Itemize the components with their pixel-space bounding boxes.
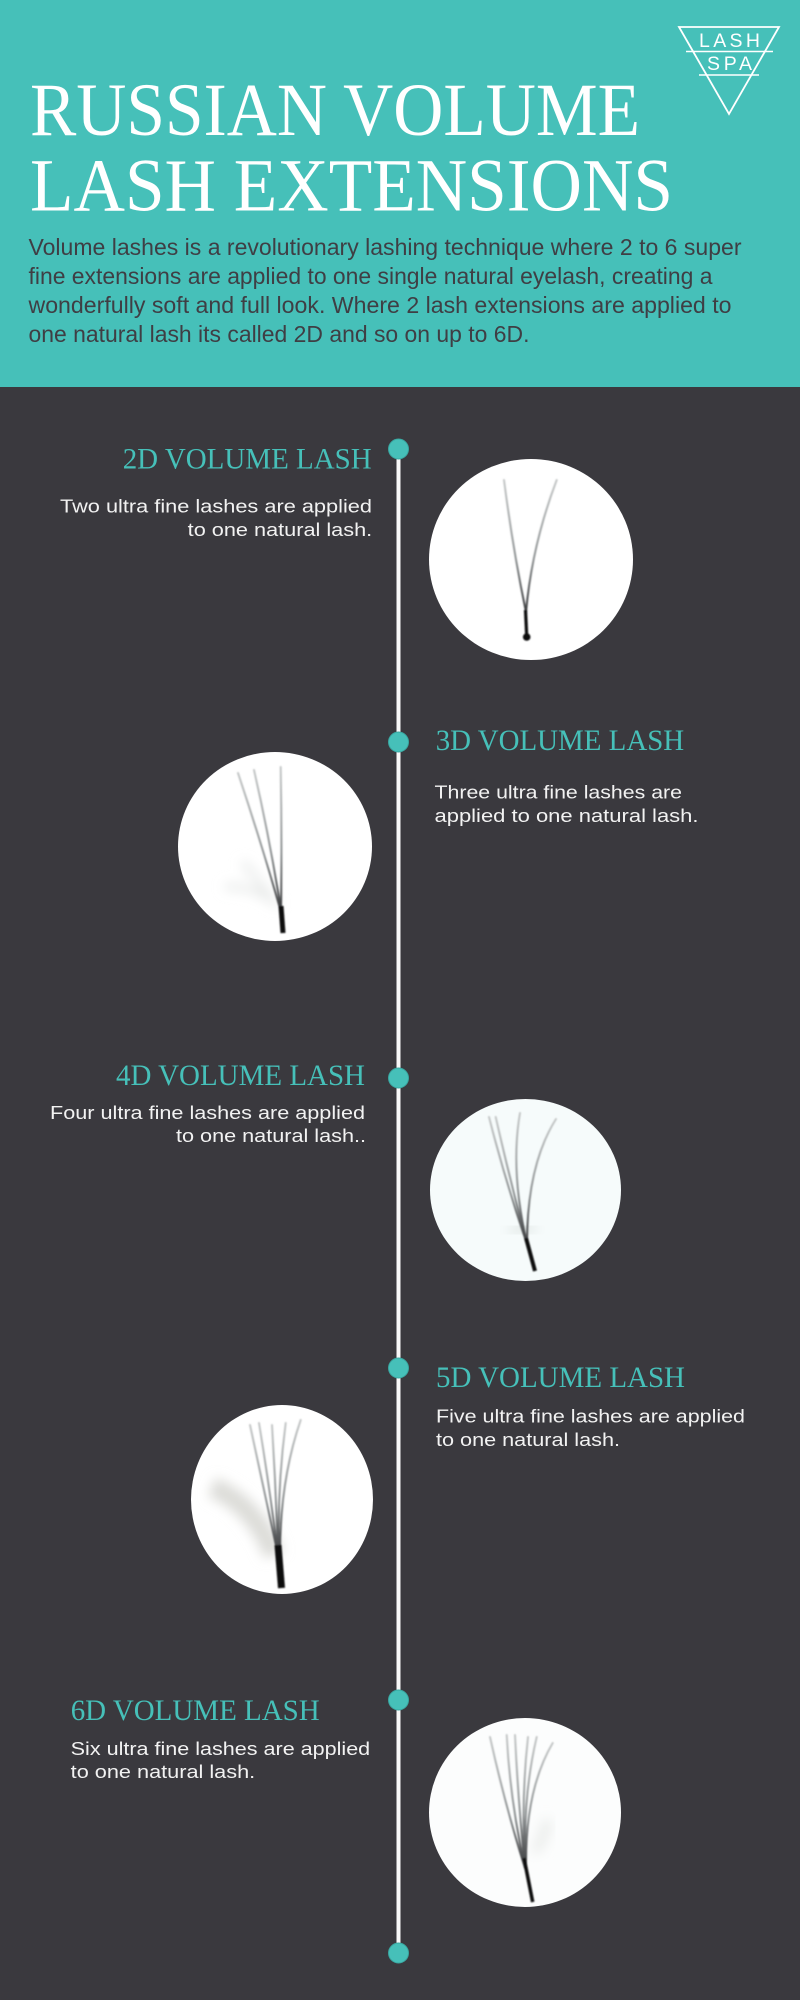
intro text block bbox=[27, 234, 742, 347]
description: 6D bbox=[71, 1738, 370, 1782]
heading: 3D: 3D VOLUME LASH bbox=[436, 724, 684, 757]
description: 3D: applied to one natural lash. bbox=[434, 805, 698, 826]
description: 4D bbox=[50, 1102, 366, 1146]
heading: 6D: 6D VOLUME LASH bbox=[71, 1694, 320, 1727]
intro text block: fine extensions are applied to one single natural eyelash, creating a bbox=[28, 263, 713, 289]
marker: 2D bbox=[388, 439, 408, 459]
marker: 4D bbox=[388, 1068, 408, 1088]
image: 2D lash bbox=[429, 459, 633, 660]
description: 6D: Six ultra fine lashes are applied bbox=[71, 1738, 370, 1759]
title: LASH EXTENSIONS bbox=[30, 144, 673, 228]
title: RUSSIAN VOLUME bbox=[30, 69, 640, 152]
logo: Lash Spa bbox=[679, 27, 779, 114]
intro text block: Volume lashes is a revolutionary lashing technique where 2 to 6 super bbox=[28, 234, 742, 260]
marker: 3D bbox=[388, 732, 408, 752]
panel: 3D text bbox=[434, 724, 698, 826]
heading: 2D: 2D VOLUME LASH bbox=[123, 442, 372, 475]
description: 2D: Two ultra fine lashes are applied bbox=[60, 496, 372, 517]
image: 6D lash bbox=[429, 1718, 621, 1907]
description: 2D: to one natural lash. bbox=[188, 519, 372, 540]
description: 2D bbox=[60, 496, 372, 540]
title bbox=[30, 69, 673, 228]
description: 4D: to one natural lash.. bbox=[176, 1125, 366, 1146]
image: 4D lash bbox=[430, 1099, 621, 1281]
intro text block: one natural lash its called 2D and so on up to 6D. bbox=[28, 321, 530, 347]
marker: end bbox=[388, 1943, 408, 1963]
logo: Lash Spa: LASH bbox=[699, 30, 760, 52]
description: 6D: to one natural lash. bbox=[71, 1761, 255, 1782]
marker: 5D bbox=[388, 1358, 408, 1378]
intro text block: wonderfully soft and full look. Where 2 lash extensions are applied to bbox=[27, 292, 732, 318]
marker: 6D bbox=[388, 1690, 408, 1710]
logo: Lash Spa: SPA bbox=[707, 53, 752, 75]
panel: 4D text bbox=[50, 1059, 366, 1146]
timeline bbox=[388, 439, 408, 1963]
description: 4D: Four ultra fine lashes are applied bbox=[50, 1102, 365, 1123]
description: 3D bbox=[434, 782, 698, 826]
description: 3D: Three ultra fine lashes are bbox=[434, 782, 682, 803]
description: 5D: Five ultra fine lashes are applied bbox=[436, 1406, 745, 1427]
description: 5D bbox=[436, 1406, 745, 1450]
heading: 4D: 4D VOLUME LASH bbox=[116, 1059, 365, 1092]
heading: 5D: 5D VOLUME LASH bbox=[436, 1361, 685, 1394]
panel: 5D text bbox=[436, 1361, 745, 1450]
panel: 2D text bbox=[60, 442, 372, 540]
panel: header bbox=[0, 0, 800, 387]
panel: 6D text bbox=[71, 1694, 370, 1782]
description: 5D: to one natural lash. bbox=[436, 1429, 620, 1450]
image: 5D lash bbox=[191, 1405, 373, 1594]
image: 3D lash bbox=[178, 752, 372, 941]
